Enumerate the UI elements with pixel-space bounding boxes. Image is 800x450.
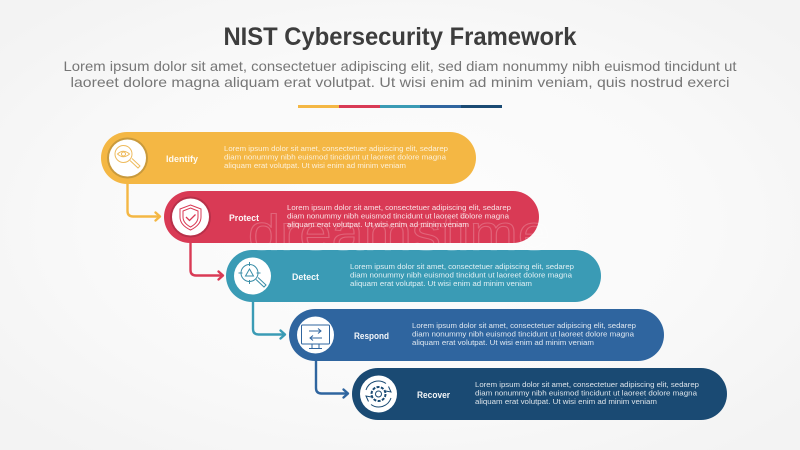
icon: monitor with arrows [302, 325, 330, 348]
description: detect: aliquam erat volutpat. Ut wisi enim ad minim veniam [350, 279, 532, 288]
subtitle text: laoreet dolore magna aliquam erat volutpat. Ut wisi enim ad minim veniam, quis nostrud exerci [70, 74, 730, 90]
label: recover: Recover [417, 390, 450, 400]
description: protect: diam nonummy nibh euismod tincidunt ut laoreet dolore magna [287, 212, 510, 220]
subtitle text: Lorem ipsum dolor sit amet, consectetuer adipiscing elit, sed diam nonummy nibh euismod tincidunt ut [64, 58, 737, 74]
description: detect [350, 262, 574, 288]
label: detect: Detect [292, 272, 319, 282]
panel: recover [352, 368, 727, 420]
title: NIST Cybersecurity Framework [224, 23, 577, 51]
description: protect: Lorem ipsum dolor sit amet, consectetuer adipiscing elit, sedarep [287, 203, 511, 212]
arrow: protect to detect [190, 243, 223, 280]
watermark: dreamstime [248, 205, 550, 261]
colored divider [298, 105, 502, 108]
panel: detect [226, 250, 601, 302]
description: recover: aliquam erat volutpat. Ut wisi enim ad minim veniam [475, 397, 657, 406]
icon: magnifier with eye [115, 146, 140, 168]
panel: respond [289, 309, 664, 361]
description: identify: Lorem ipsum dolor sit amet, consectetuer adipiscing elit, sedarep [224, 144, 448, 153]
description: respond: aliquam erat volutpat. Ut wisi enim ad minim veniam [412, 338, 594, 347]
arrow: detect to respond [253, 302, 285, 338]
panel: protect [164, 191, 539, 243]
description: respond: diam nonummy nibh euismod tincidunt ut laoreet dolore magna [412, 330, 635, 338]
arrow: identify to protect [128, 184, 160, 220]
icon: target with alert and magnifier [238, 262, 266, 287]
description: identify: diam nonummy nibh euismod tincidunt ut laoreet dolore magna [224, 152, 447, 162]
panel: identify [101, 132, 476, 184]
description: detect: diam nonummy nibh euismod tincidunt ut laoreet dolore magna [350, 270, 573, 280]
description: protect [287, 203, 511, 229]
description: identify [224, 144, 448, 170]
arrow: respond to recover [316, 361, 348, 398]
description: recover [475, 380, 699, 406]
description: recover: Lorem ipsum dolor sit amet, consectetuer adipiscing elit, sedarep [475, 380, 699, 389]
icon: shield with check [180, 205, 201, 230]
description: recover: diam nonummy nibh euismod tincidunt ut laoreet dolore magna [475, 388, 698, 398]
description: respond: Lorem ipsum dolor sit amet, consectetuer adipiscing elit, sedarep [412, 321, 636, 330]
description: respond [412, 321, 636, 347]
label: respond: Respond [354, 331, 389, 341]
subtitle text [64, 58, 737, 90]
label: identify: Identify [166, 154, 198, 164]
description: identify: aliquam erat volutpat. Ut wisi enim ad minim veniam [224, 161, 406, 170]
description: detect: Lorem ipsum dolor sit amet, consectetuer adipiscing elit, sedarep [350, 262, 574, 271]
icon: gear with cycle arrows [366, 381, 391, 407]
description: protect: aliquam erat volutpat. Ut wisi enim ad minim veniam [287, 220, 469, 229]
label: protect: Protect [229, 213, 259, 223]
